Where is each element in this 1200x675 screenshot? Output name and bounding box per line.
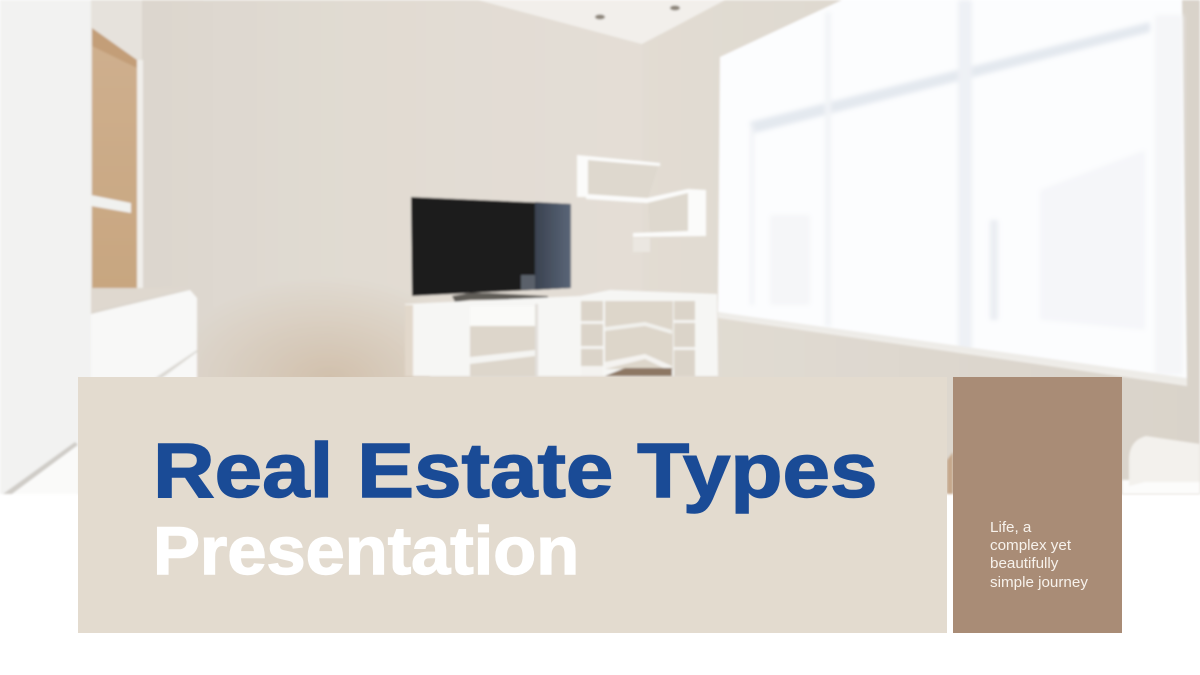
back wall xyxy=(91,0,661,494)
right side wall xyxy=(642,0,1200,494)
subtitle: Presentation: Presentation xyxy=(153,512,579,589)
title panel xyxy=(78,377,947,633)
corner wall shelves xyxy=(577,155,706,252)
ceiling xyxy=(478,0,725,44)
television xyxy=(411,197,571,302)
wall shadow behind television xyxy=(180,220,430,380)
tagline text: Life, a xyxy=(990,519,1032,536)
white sofa xyxy=(1122,436,1200,494)
title: Real Estate Types: Real Estate Types xyxy=(153,428,878,514)
tagline text: simple journey xyxy=(990,574,1088,591)
wood floor scrap xyxy=(947,452,953,494)
photo: white living room interior xyxy=(0,0,1200,494)
tagline text: complex yet xyxy=(990,537,1072,554)
window with sheer curtain xyxy=(718,0,1187,386)
corner media cabinet xyxy=(405,290,718,376)
tagline panel xyxy=(953,377,1122,633)
tagline text xyxy=(990,519,1088,591)
ceiling spotlights xyxy=(595,6,680,20)
white wardrobe at left xyxy=(0,0,197,494)
tagline text: beautifully xyxy=(990,555,1059,572)
